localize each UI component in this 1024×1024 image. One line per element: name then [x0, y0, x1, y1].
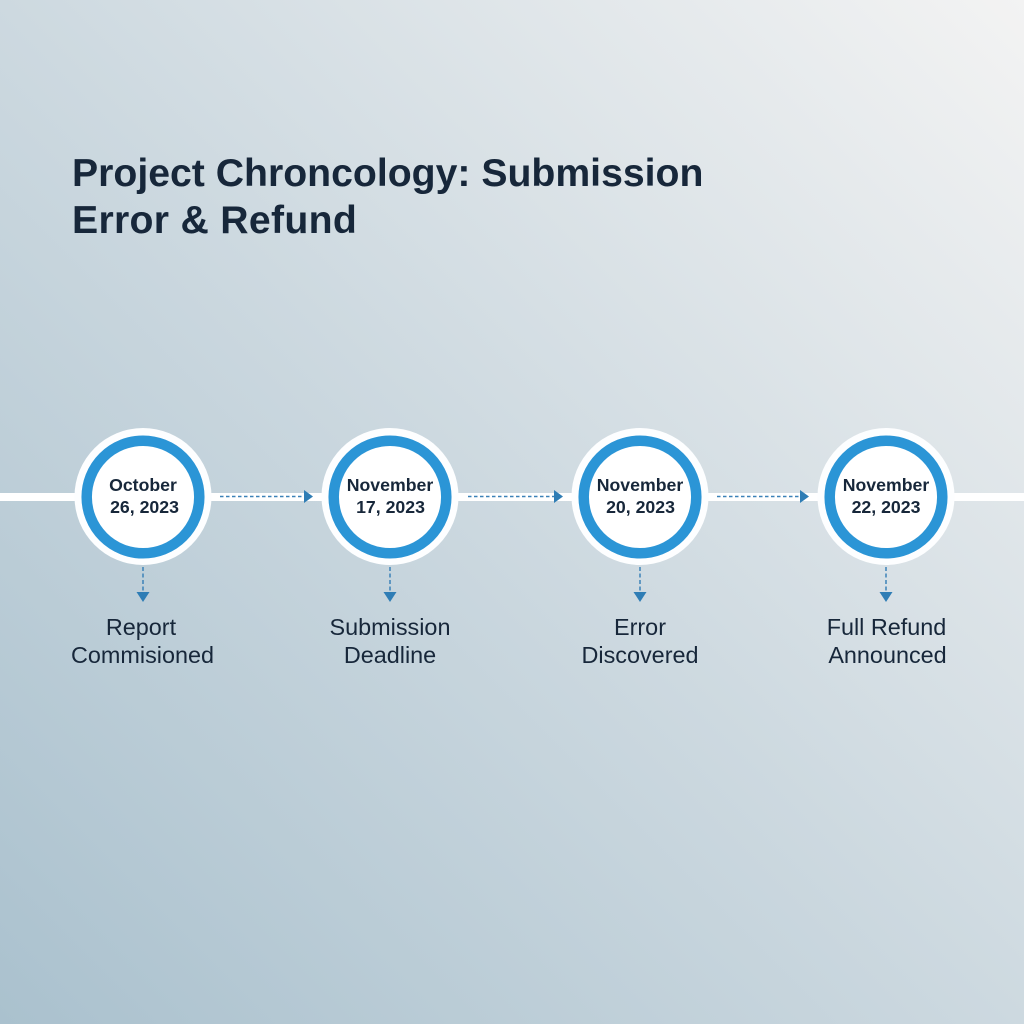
title: Error & Refund	[72, 199, 357, 242]
arrow: november 20 to november 22	[717, 490, 809, 503]
date: 22, 2023	[852, 497, 921, 517]
node circle	[818, 428, 954, 565]
date: October	[109, 475, 177, 495]
milestone 2: November 17, 2023	[322, 428, 458, 668]
label: Report	[106, 614, 176, 640]
arrow down	[384, 567, 396, 602]
date: 20, 2023	[606, 497, 675, 517]
label: Discovered	[582, 642, 698, 668]
milestone 1: October 26, 2023	[71, 428, 214, 668]
milestone 4: November 22, 2023	[818, 428, 954, 668]
date: November	[843, 475, 929, 495]
arrow down	[136, 567, 150, 602]
label: Submission	[330, 614, 450, 640]
timeline line	[0, 493, 1024, 501]
label: Commisioned	[71, 642, 214, 668]
date: November	[347, 475, 433, 495]
arrow down	[880, 567, 892, 602]
arrow down	[634, 567, 646, 602]
label: Announced	[828, 642, 947, 668]
title: Project Chroncology: Submission	[72, 152, 703, 195]
date: 17, 2023	[356, 497, 425, 517]
node circle	[322, 428, 458, 565]
label: Deadline	[344, 642, 436, 668]
date: 26, 2023	[110, 497, 179, 517]
arrow: november 17 to november 20	[468, 490, 563, 503]
milestone 3: November 20, 2023	[572, 428, 708, 668]
date: November	[597, 475, 683, 495]
node circle	[74, 428, 212, 565]
node circle	[572, 428, 708, 565]
arrow: october to november 17	[220, 490, 313, 503]
label: Error	[614, 614, 666, 640]
label: Full Refund	[827, 614, 946, 640]
